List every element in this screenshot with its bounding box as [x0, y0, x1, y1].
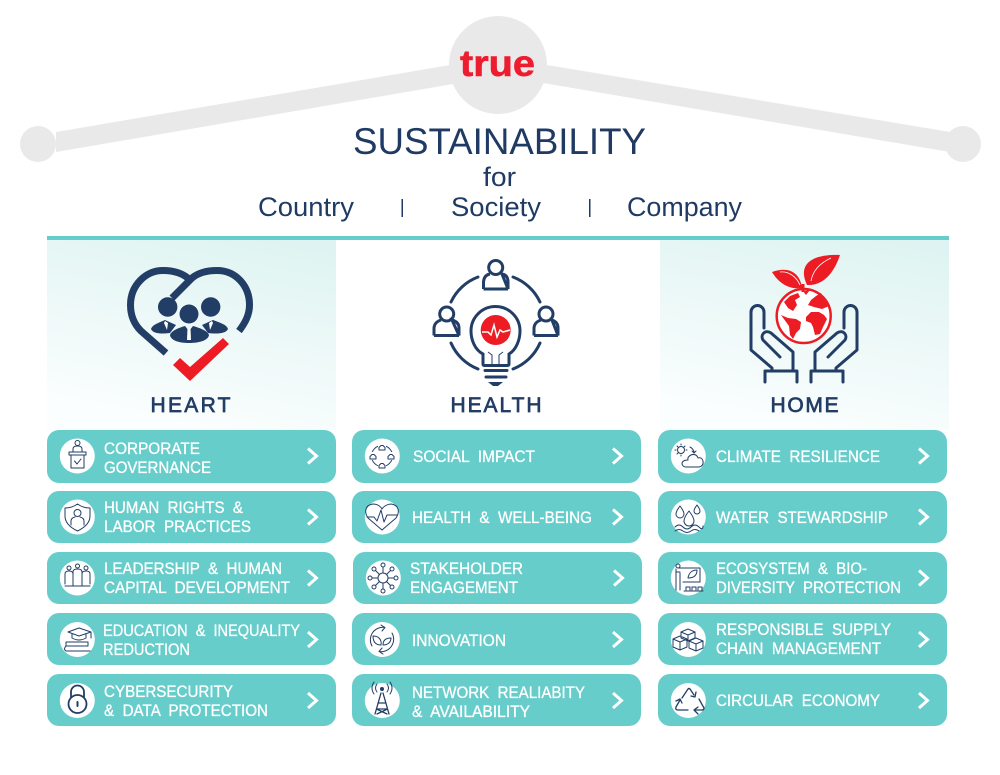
column: heart topics	[47, 430, 336, 726]
button: ecosystem and biodiversity: DIVERSITY PROTECTION	[716, 579, 901, 597]
button: ecosystem and biodiversity: ECOSYSTEM & BIO-	[716, 560, 867, 578]
button: leadership: CAPITAL DEVELOPMENT	[104, 579, 290, 597]
roof with logo	[20, 16, 981, 162]
heading: HOME: HOME	[770, 394, 838, 417]
title: SUSTAINABILITY	[353, 121, 646, 162]
button: network reliability: NETWORK REALIABITY	[412, 684, 585, 702]
button: responsible supply chain: RESPONSIBLE SUPPLY	[716, 621, 891, 639]
logo: true: true	[460, 43, 535, 84]
panel: heart header	[47, 240, 336, 430]
button: climate resilience	[658, 430, 947, 483]
button: responsible supply chain	[658, 613, 947, 665]
icon: heart with people and check	[130, 270, 250, 381]
button: circular economy	[658, 674, 947, 726]
button: corporate governance: CORPORATE	[104, 440, 200, 458]
heading: HEALTH: HEALTH	[450, 394, 542, 417]
top rule	[47, 236, 949, 240]
subtitle: audiences: Society	[451, 192, 542, 222]
button: social impact: SOCIAL IMPACT	[413, 448, 535, 466]
icon: hands holding planet	[751, 255, 857, 382]
column: health topics	[352, 430, 642, 726]
button: education	[47, 613, 336, 665]
button: cybersecurity	[47, 674, 336, 726]
subtitle: for: for	[483, 162, 516, 192]
button: ecosystem and biodiversity	[658, 552, 947, 604]
button: health and well-being	[352, 491, 641, 543]
button: human rights: HUMAN RIGHTS &	[104, 499, 243, 517]
subtitle: audiences: Country	[258, 192, 355, 222]
heading: HEART: HEART	[150, 394, 231, 417]
button: cybersecurity: & DATA PROTECTION	[104, 702, 268, 720]
panel: home header	[660, 240, 949, 430]
button: human rights	[47, 491, 336, 543]
subtitle: audiences	[258, 192, 742, 222]
button: social impact	[352, 430, 641, 483]
button: stakeholder engagement: STAKEHOLDER	[410, 560, 523, 578]
button: human rights: LABOR PRACTICES	[104, 518, 251, 536]
button: leadership: LEADERSHIP & HUMAN	[104, 560, 282, 578]
button: corporate governance	[47, 430, 336, 483]
button: education: REDUCTION	[103, 641, 190, 659]
button: health and well-being: HEALTH & WELL-BEING	[412, 509, 592, 527]
button: network reliability: & AVAILABILITY	[412, 703, 530, 721]
button: cybersecurity: CYBERSECURITY	[104, 683, 233, 701]
column: home topics	[658, 430, 947, 726]
subtitle: audiences: Company	[627, 192, 742, 222]
button: leadership	[47, 552, 336, 604]
button: innovation: INNOVATION	[412, 632, 506, 650]
button: stakeholder engagement	[353, 552, 642, 604]
button: stakeholder engagement: ENGAGEMENT	[410, 579, 518, 597]
button: innovation	[352, 613, 641, 665]
button: circular economy: CIRCULAR ECONOMY	[716, 692, 880, 710]
button: climate resilience: CLIMATE RESILIENCE	[716, 448, 880, 466]
button: network reliability	[352, 674, 641, 726]
button: water stewardship	[658, 491, 947, 543]
button: water stewardship: WATER STEWARDSHIP	[716, 509, 888, 527]
button: responsible supply chain: CHAIN MANAGEMENT	[716, 640, 881, 658]
icon: bulb with people	[434, 260, 558, 386]
button: corporate governance: GOVERNANCE	[104, 459, 211, 477]
button: education: EDUCATION & INEQUALITY	[103, 622, 300, 640]
